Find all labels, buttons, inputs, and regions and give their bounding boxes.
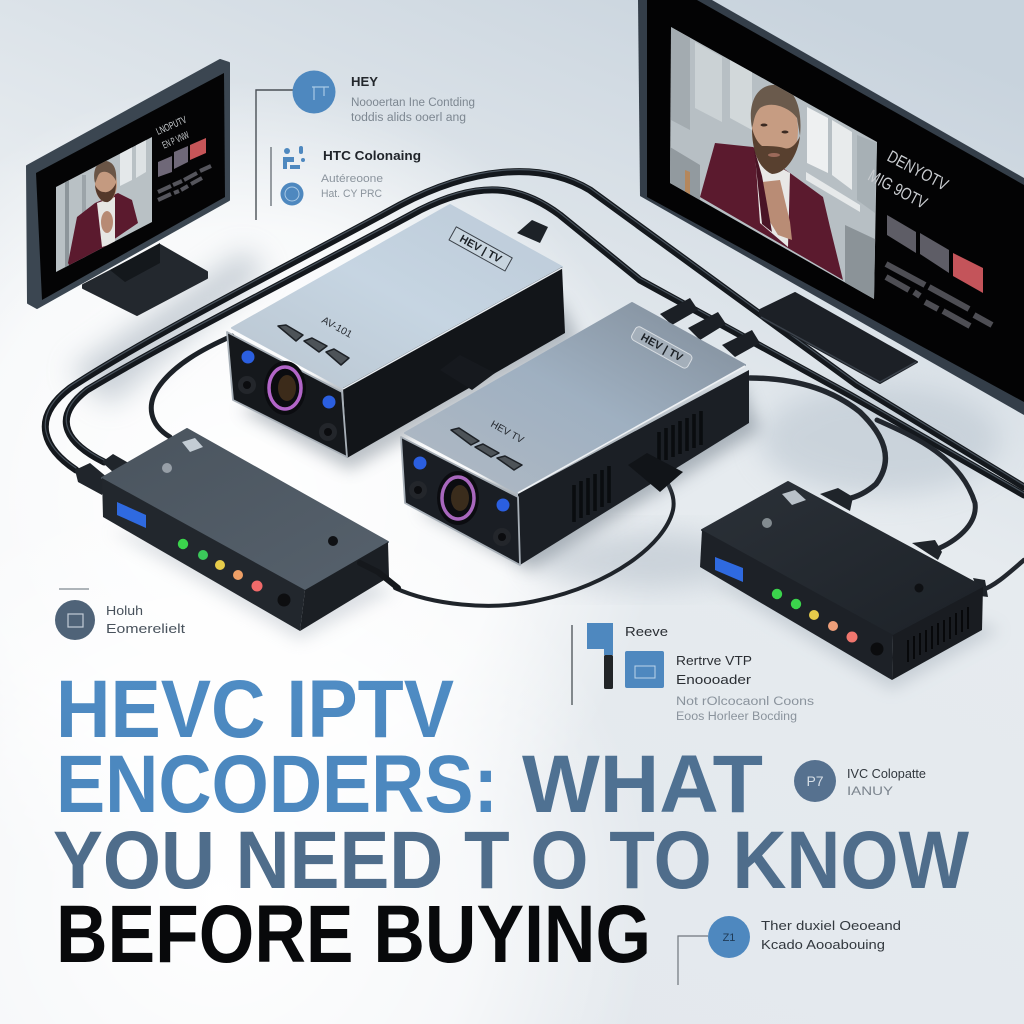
hub: right <box>700 482 1000 690</box>
nameplate <box>449 227 512 271</box>
status leds <box>178 539 290 606</box>
nameplate <box>630 325 693 370</box>
buttons <box>451 428 522 470</box>
plug side <box>628 453 683 492</box>
callout: Reeve encoder: Eoos Horleer Bocding <box>676 711 797 723</box>
callout: Reeve encoder: Enoooader <box>676 672 752 687</box>
device label: HEV TV <box>489 419 526 446</box>
monitor stand large <box>760 293 917 383</box>
monitor: right <box>638 0 1024 415</box>
screen tiles large <box>886 215 992 326</box>
plugs <box>660 298 760 357</box>
status leds <box>772 589 884 656</box>
icon: blue square <box>625 651 664 688</box>
callout: Reeve encoder: Not rOlcocaonl Coons <box>676 696 814 708</box>
callout: bottom left: Eomerelielt <box>106 621 185 636</box>
title: WHAT <box>522 739 763 830</box>
title: BEFORE BUYING <box>56 889 651 980</box>
encoder: rear silver unit <box>227 205 580 470</box>
callout: HTC Colonaing: Autéreoone <box>321 173 383 185</box>
connectors <box>820 488 988 597</box>
callout: bottom right <box>678 916 901 985</box>
callout: HEY: HEY <box>351 75 379 89</box>
callout: bottom right: Z1 <box>723 932 735 944</box>
title: HEVC IPTV <box>56 664 454 755</box>
icon: blue ring <box>280 182 304 206</box>
title: ENCODERS: <box>56 739 498 830</box>
nameplate: HEV | TV <box>639 332 685 365</box>
screen tiles small <box>158 138 211 200</box>
callout: Reeve encoder <box>572 623 814 723</box>
callout: HTC Colonaing: Hat. CY PRC <box>321 188 382 200</box>
device label: AV-101 <box>320 315 354 341</box>
icon: blue dots <box>283 146 305 169</box>
callout: HTC Colonaing <box>271 146 421 206</box>
callout: P7 <box>794 760 926 802</box>
plug side <box>440 355 495 390</box>
callout: HTC Colonaing: HTC Colonaing <box>323 148 421 163</box>
lens <box>264 361 306 415</box>
callout: Reeve encoder: Reeve <box>625 624 668 639</box>
photo: presenter small <box>56 137 152 272</box>
vents <box>574 411 701 522</box>
callout: P7: IVC Colopatte <box>847 767 926 781</box>
callout: P7: IANUY <box>847 784 893 798</box>
connectors <box>75 454 132 495</box>
screen text small: LNOPUTV <box>155 115 189 138</box>
photo: presenter <box>670 27 877 300</box>
title <box>53 664 970 980</box>
callout: bottom right: Kcado Aooabouing <box>761 938 885 952</box>
callout: P7: P7 <box>806 773 824 789</box>
callout: HEY: toddis alids ooerl ang <box>351 112 466 124</box>
hub: left <box>75 429 398 640</box>
lens <box>437 471 479 525</box>
buttons <box>278 325 349 365</box>
nameplate: HEV | TV <box>457 233 504 266</box>
jacket <box>700 143 843 280</box>
screen heading large: DENYOTV <box>884 147 952 195</box>
icon: blue circle <box>292 70 336 114</box>
callout: bottom left <box>55 589 185 640</box>
icon: chat square <box>55 600 95 640</box>
icon: blue tag with bar <box>587 623 613 689</box>
cables <box>45 170 1024 606</box>
callout: HEY: Noooertan Ine Contding <box>351 97 475 109</box>
encoder: front silver unit <box>401 298 760 570</box>
screen text small <box>155 115 195 151</box>
callout: Reeve encoder: Rertrve VTP <box>676 653 752 668</box>
monitor stand <box>83 243 207 315</box>
screen heading large <box>865 143 952 218</box>
plug top <box>517 220 548 243</box>
callout: bottom left: Holuh <box>106 603 143 618</box>
callout: bottom right: Ther duxiel Oeoeand <box>761 919 901 933</box>
screen text small: EN P VNW <box>161 130 191 151</box>
screen heading large: MIG 9OTV <box>865 166 931 213</box>
monitor: left <box>27 60 229 315</box>
callout: HEY <box>256 70 475 220</box>
leds and knobs <box>238 350 337 441</box>
vents <box>908 607 968 662</box>
leds and knobs <box>409 456 511 546</box>
